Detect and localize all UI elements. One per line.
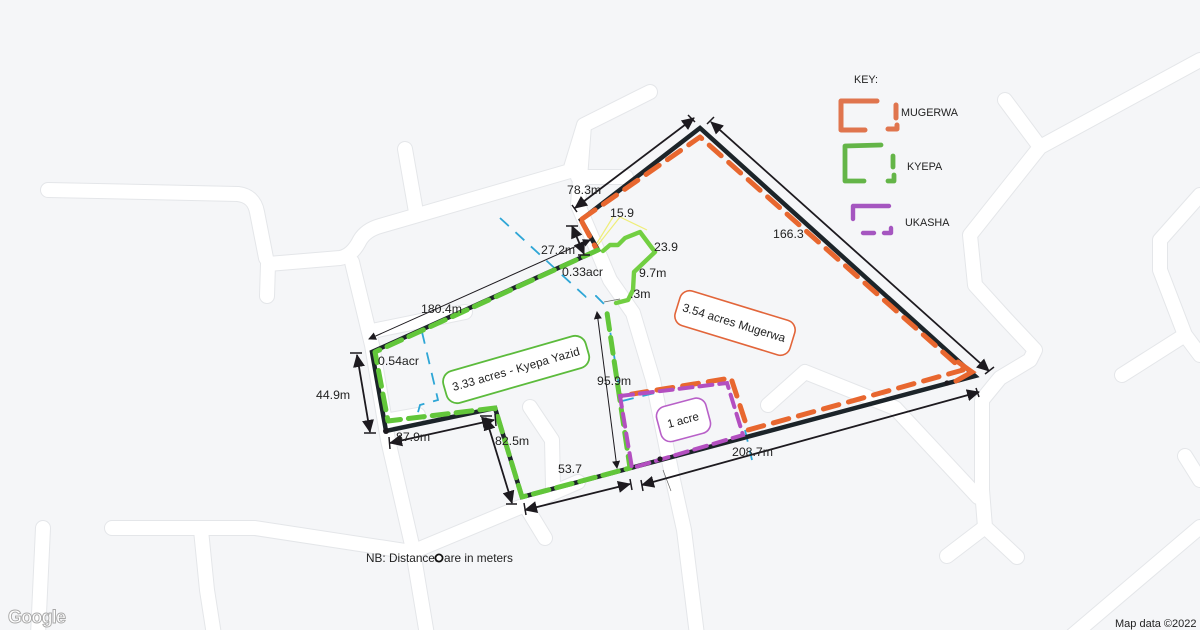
dimension labels: .3m xyxy=(630,287,650,301)
label: Ukasha area xyxy=(654,396,713,444)
dimension labels xyxy=(316,183,804,476)
dimension labels: 180.4m xyxy=(421,302,462,316)
legend key: KEY: xyxy=(854,74,878,86)
Mugerwa orange dashed plot xyxy=(582,137,963,430)
dimension labels: 53.7 xyxy=(558,462,582,476)
note: NB: Distances are in meters xyxy=(366,551,513,565)
yellow sight lines xyxy=(597,217,647,246)
black surveyed boundary xyxy=(372,128,975,497)
label: Kyepa Yazid area: 3.33 acres - Kyepa Yazid xyxy=(451,345,581,394)
Google logo: Google xyxy=(8,607,66,627)
black survey dots xyxy=(383,380,950,462)
label: Mugerwa area: 3.54 acres Mugerwa xyxy=(681,300,788,345)
dimension labels: 78.3m xyxy=(567,183,601,197)
dimension labels: 23.9 xyxy=(654,240,678,254)
dimension labels: 208.7m xyxy=(732,445,773,459)
Mugerwa plot arrowhead corner xyxy=(956,362,972,381)
dimension labels: 95.9m xyxy=(597,374,631,388)
dimension labels: 0.33acr xyxy=(562,265,603,279)
dimension labels: 166.3 xyxy=(773,227,804,241)
dimension labels: 87.9m xyxy=(396,430,430,444)
legend: Mugerwa xyxy=(841,101,959,130)
dimension labels: 82.5m xyxy=(495,434,529,448)
legend: Kyepa xyxy=(845,145,943,181)
thin grey ticks xyxy=(604,299,671,491)
dimension arrows xyxy=(350,115,994,515)
legend key xyxy=(841,74,959,233)
legend: Ukasha xyxy=(853,206,950,233)
dimension labels: 0.54acr xyxy=(378,354,419,368)
label: Mugerwa area xyxy=(672,288,798,358)
dashed blue boundary lines xyxy=(417,218,752,470)
label: Ukasha area: 1 acre xyxy=(666,410,700,431)
dimension labels: 44.9m xyxy=(316,388,350,402)
legend: Ukasha: UKASHA xyxy=(905,217,950,229)
Kyepa green boundary xyxy=(375,232,655,497)
map attribution: Map data ©2022 xyxy=(1115,618,1196,630)
legend: Kyepa: KYEPA xyxy=(907,161,943,173)
dimension labels: 9.7m xyxy=(639,266,666,280)
dimension labels: 15.9 xyxy=(610,206,634,220)
label: Kyepa Yazid area xyxy=(440,333,592,406)
legend: Mugerwa: MUGERWA xyxy=(901,107,959,119)
Ukasha purple dashed plot xyxy=(620,383,743,468)
dimension labels: 27.2m xyxy=(541,243,575,257)
